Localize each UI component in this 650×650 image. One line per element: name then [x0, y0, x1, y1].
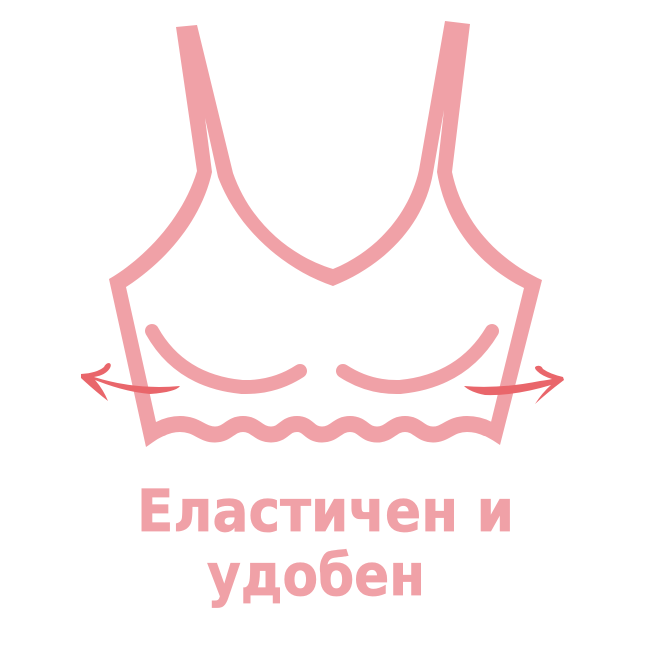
title line 2: удобен [207, 541, 425, 609]
wavy hem [160, 424, 488, 434]
arrow: stretch left [81, 363, 180, 401]
bra upper outline with straps [109, 21, 542, 447]
title text [137, 477, 514, 609]
arrow: stretch right [464, 366, 564, 404]
title line 1: Еластичен и [137, 477, 514, 545]
right cup seam [343, 331, 492, 387]
icon: bra top outline [109, 21, 542, 447]
left cup seam [152, 331, 300, 387]
